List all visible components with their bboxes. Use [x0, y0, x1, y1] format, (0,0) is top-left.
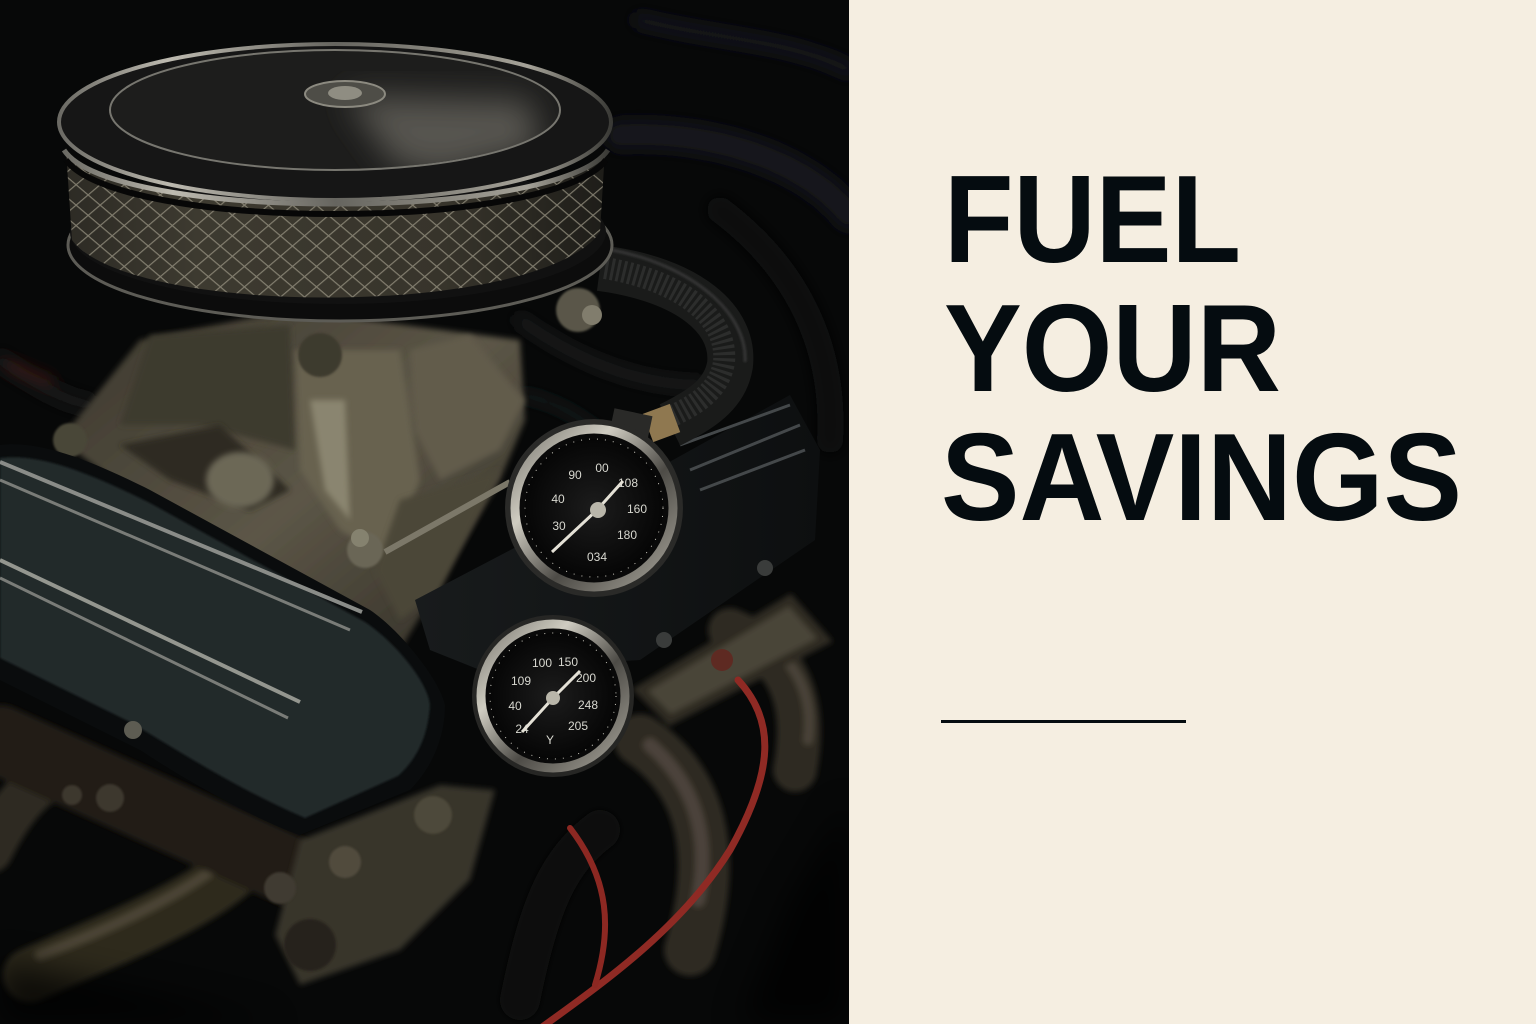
gauge: lower: 205	[568, 719, 588, 733]
background hoses	[0, 20, 849, 450]
title: FUEL	[944, 151, 1241, 289]
red ignition wires	[538, 649, 765, 1024]
gauge: upper: 160	[627, 502, 647, 516]
exhaust headers	[0, 600, 825, 1000]
lid conical sheen	[345, 95, 540, 175]
left valve cover	[0, 444, 445, 835]
background panel: cream	[849, 0, 1536, 1024]
right valve cover	[415, 395, 820, 670]
gauge: upper: 90	[568, 468, 582, 482]
gauge: upper: 180	[617, 528, 637, 542]
gauge: lower: 248	[578, 698, 598, 712]
gauge: upper: 40	[551, 492, 565, 506]
gauge: lower: 200	[576, 671, 596, 685]
rubber hose	[600, 250, 745, 428]
gauge: lower: 40	[508, 699, 522, 713]
lower engine castings	[62, 784, 495, 985]
gauge: upper: 108	[618, 476, 638, 490]
engine photograph panel	[0, 0, 849, 1024]
divider rule	[941, 720, 1186, 723]
gauge: upper	[505, 419, 683, 597]
title	[941, 151, 1462, 547]
gauge: lower: 24	[515, 722, 529, 736]
engine block and carburetor	[52, 286, 602, 644]
gauge: lower: 109	[511, 674, 531, 688]
gauge: lower: 100	[532, 656, 552, 670]
gauge: lower	[472, 615, 634, 777]
gauge: lower: 150	[558, 655, 578, 669]
air cleaner	[59, 44, 612, 321]
gauge: upper: 034	[587, 550, 607, 564]
gauge: upper: 30	[552, 519, 566, 533]
gauge: lower: Y	[546, 733, 554, 747]
dark vignette	[3, 954, 96, 1005]
title: SAVINGS	[941, 409, 1462, 547]
gauge: upper: 00	[595, 461, 609, 475]
title: YOUR	[944, 280, 1281, 418]
